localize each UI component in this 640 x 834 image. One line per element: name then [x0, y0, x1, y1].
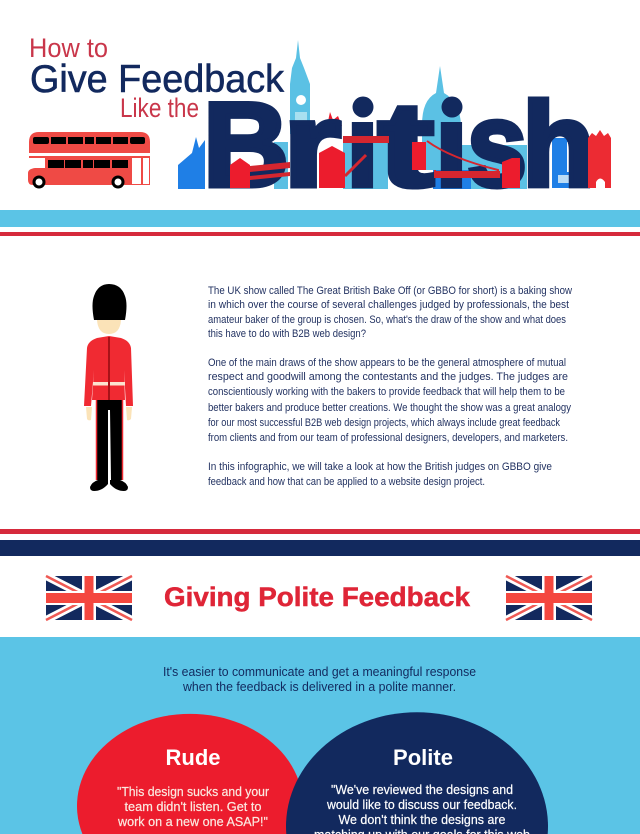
intro text: conscientiously working with the bakers to provide feedback that will help them to be — [208, 386, 565, 398]
band: header stripes — [0, 210, 640, 236]
heading: British: t — [378, 78, 434, 212]
intro text: In this infographic, we will take a look at how the British judges on GBBO give — [208, 461, 552, 473]
circle: rude: Rude — [166, 745, 220, 770]
title: How to Give Feedback Like the: Like the — [120, 93, 199, 123]
circle: rude: team didn't listen. Get to — [124, 799, 262, 814]
heading: British: i — [435, 78, 468, 212]
icon: Queen's guard soldier — [84, 284, 133, 491]
heading: British — [208, 96, 590, 190]
circle: rude: "This design sucks and your — [117, 784, 270, 799]
circle: rude: work on a new one ASAP!" — [117, 814, 268, 829]
intro sentence: It's easier to communicate and get a meaningful response — [163, 664, 476, 679]
title: How to Give Feedback Like the: How to — [29, 33, 108, 63]
heading: British: B — [203, 78, 289, 212]
intro text: in which over the course of several challenges judged by professionals, the best — [208, 299, 569, 311]
circle: polite — [286, 712, 548, 834]
circle: polite: Polite — [393, 745, 453, 770]
circle: rude — [77, 714, 303, 834]
intro text: amateur baker of the group is chosen. So, what's the draw of the show and what does — [208, 314, 567, 326]
intro text: The UK show called The Great British Bake Off (or GBBO for short) is a baking show — [208, 285, 572, 297]
icon: left Union Jack flag — [46, 576, 132, 620]
circle: polite: would like to discuss our feedback. — [326, 797, 517, 812]
intro text: better bakers and produce better creations. We thought the show was a great analogy — [208, 402, 572, 414]
heading: British: r — [283, 78, 341, 212]
intro text: respect and goodwill among the contestants and the judges. The judges are — [208, 371, 568, 383]
circle: polite: We don't think the designs are — [338, 812, 506, 827]
title: How to Give Feedback Like the — [29, 33, 284, 123]
intro text — [208, 285, 572, 488]
intro sentence: when the feedback is delivered in a polite manner. — [182, 679, 456, 694]
skyline landmarks in red — [230, 130, 611, 188]
icon: right Union Jack flag — [506, 576, 592, 620]
band: divider stripes — [0, 529, 640, 556]
heading: British: h — [522, 78, 595, 212]
icon: red double-decker bus — [28, 132, 150, 188]
intro text: from clients and from our team of professional designers, developers, and marketers. — [208, 432, 568, 444]
heading: British: s — [467, 78, 527, 212]
intro text: for our most successful B2B web design projects, which always include great feedback — [208, 417, 561, 429]
circle: polite: "We've reviewed the designs and — [331, 782, 513, 797]
title: How to Give Feedback Like the: Give Feedback — [30, 58, 284, 101]
heading: Giving Polite Feedback: Giving Polite Feedback — [164, 582, 471, 612]
intro sentence — [163, 664, 476, 694]
panel: polite feedback — [0, 637, 640, 834]
skyline behind the lettering — [178, 40, 576, 189]
intro text: this have to do with B2B web design? — [208, 328, 366, 340]
intro text: feedback and how that can be applied to a website design project. — [208, 476, 485, 488]
heading: British: i — [346, 78, 379, 212]
intro text: One of the main draws of the show appears to be the general atmosphere of mutual — [208, 357, 566, 369]
